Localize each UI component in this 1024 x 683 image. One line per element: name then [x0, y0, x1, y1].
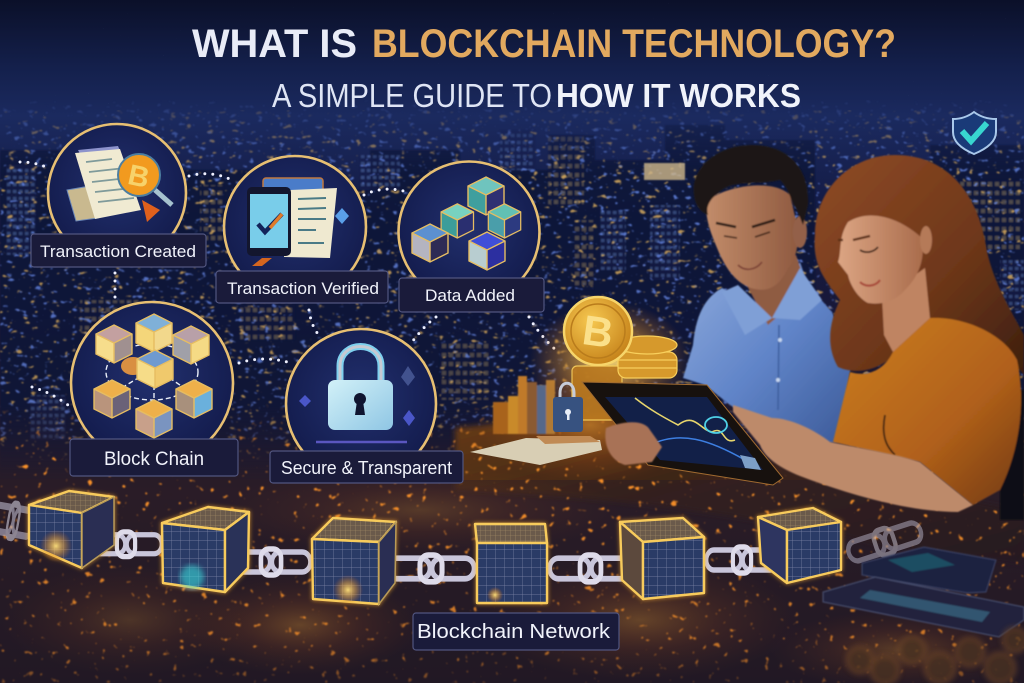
lower sparks field: [0, 400, 1024, 683]
cube 4: [475, 524, 547, 603]
neck: [882, 268, 930, 352]
icon: block network: [94, 314, 212, 438]
blockchain cubes: [29, 491, 841, 605]
subtitle: HOW IT WORKS: [556, 77, 801, 114]
notepad and pencil: [470, 436, 602, 465]
face: [706, 185, 798, 290]
icon: bitcoin coins: B: [580, 306, 616, 357]
shirt: [683, 262, 852, 448]
hands and arm: [605, 405, 973, 512]
hair: [694, 145, 808, 225]
title: WHAT IS: [192, 22, 357, 66]
collar: [722, 268, 822, 335]
panel: data added: [398, 162, 544, 312]
icon: books: [493, 376, 555, 434]
desk with glow: [455, 365, 1024, 565]
label: [399, 278, 544, 312]
title: [192, 22, 896, 66]
neck: [745, 255, 808, 325]
label: blockchain network: [413, 613, 619, 650]
icon: stacked cubes: [412, 177, 521, 270]
face: [838, 215, 923, 304]
cube 6: [758, 508, 841, 583]
icon: padlock: [299, 346, 415, 442]
coins pile: [847, 628, 1024, 683]
label: Transaction Created: [40, 242, 196, 261]
label: [70, 439, 238, 476]
icon: documents and bitcoin coin: [67, 146, 172, 222]
icon: shield with check: [953, 112, 996, 154]
label: Secure & Transparent: [281, 458, 452, 478]
chain links: [0, 501, 924, 582]
panel: transaction created: [31, 124, 206, 267]
icon: documents and bitcoin coin: B: [125, 159, 152, 195]
dark right edge: [1000, 390, 1024, 520]
subtitle: [272, 77, 801, 114]
subtitle: A SIMPLE GUIDE TO: [272, 77, 552, 114]
panel: block chain: [70, 302, 238, 476]
panel: transaction verified: [216, 156, 388, 303]
label: blockchain network: Blockchain Network: [417, 621, 611, 643]
blouse: [833, 318, 1021, 505]
label: Data Added: [425, 286, 515, 305]
icon: bitcoin coins: [530, 297, 690, 420]
hair back: [815, 155, 1024, 375]
icon: small padlock: [553, 383, 583, 432]
label: Block Chain: [104, 449, 204, 470]
devices stack: [823, 547, 1024, 637]
cube 1: [29, 491, 114, 568]
label: [270, 451, 463, 483]
label: Transaction Verified: [227, 279, 379, 298]
person: man: [683, 145, 852, 448]
connector dots: [20, 162, 558, 405]
label: [216, 271, 388, 303]
cube 2: [162, 507, 249, 592]
person: woman: [815, 155, 1024, 520]
title: BLOCKCHAIN TECHNOLOGY?: [372, 22, 896, 66]
cube 3: [312, 518, 396, 605]
tablet: [582, 382, 783, 485]
icon: tablet with check and document: [247, 178, 349, 266]
cube 5: [620, 518, 704, 599]
panel: secure and transparent: [270, 329, 463, 483]
label: [31, 234, 206, 267]
